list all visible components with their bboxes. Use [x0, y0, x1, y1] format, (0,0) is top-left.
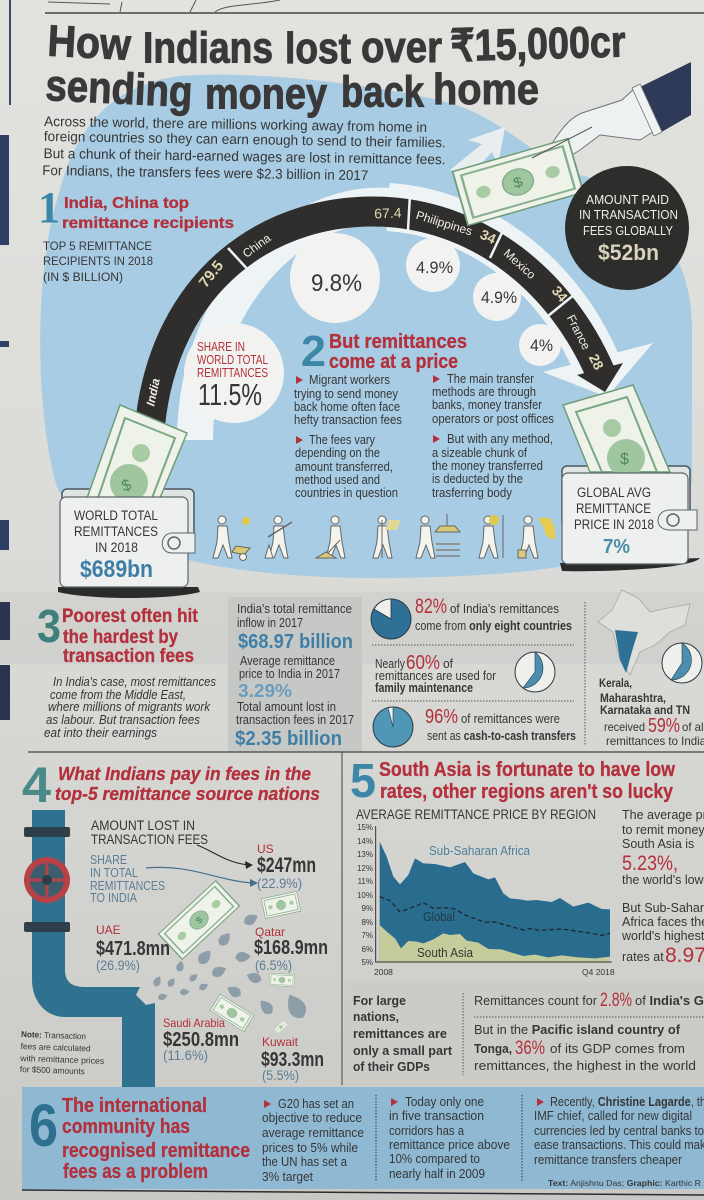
panel: remittances and GDP: 2.8% [600, 990, 632, 1011]
bullets column 1: Migrant workers [309, 372, 390, 387]
data label: Saudi Arabia: Saudi Arabia [163, 1016, 225, 1030]
recipients arc arrow chart: 79.5 [196, 257, 227, 291]
bullets column 2: operators or post offices [432, 411, 554, 426]
section 6 column 2: corridors has a [389, 1123, 465, 1138]
icon strip: migrant workers [213, 514, 555, 560]
blue background blob [40, 75, 692, 578]
note: for $500 amounts [20, 1064, 85, 1076]
section 3 body text: eat into their earnings [44, 726, 157, 740]
data label: UAE: $471.8mn [96, 938, 170, 960]
area chart: remittance price by region: 13% [357, 850, 373, 859]
panel: India remittance figures: transaction fees in 2017 [236, 713, 354, 727]
icon: left wallet with banknote: IN 2018 [95, 540, 138, 555]
section 6 column 3: remittance transfers cheaper [534, 1152, 683, 1167]
stat: family maintenance: family maintenance [375, 681, 473, 695]
data label: Qatar: Qatar [255, 925, 285, 939]
panel: remittances and GDP: 36% [515, 1038, 545, 1059]
area chart: remittance price by region [357, 823, 615, 977]
arrow: amount [197, 845, 253, 869]
bullets column 2 [432, 371, 554, 500]
section 3 heading: 3 [37, 600, 61, 652]
stat: southern states: received [604, 720, 645, 734]
section 6 column 1: the UN has set a [262, 1154, 348, 1169]
area chart: remittance price by region: Q4 2018 [582, 967, 615, 977]
chart subtitle: TOP 5 REMITTANCE [43, 241, 152, 253]
data label: Qatar: $168.9mn [254, 937, 328, 959]
panel: India remittance figures [228, 597, 362, 752]
recipients arc arrow chart: China [240, 231, 274, 261]
note [19, 1029, 105, 1077]
note: fees are calculated [21, 1041, 91, 1053]
chart title: AVERAGE REMITTANCE PRICE BY REGION [356, 807, 596, 822]
intro text [42, 113, 446, 184]
section 5 heading [350, 755, 675, 808]
title: money [205, 70, 327, 118]
area chart: remittance price by region: 2008 [374, 967, 393, 977]
section 6 heading: recognised remittance [62, 1140, 250, 1162]
section 3 body text: In India's case, most remittances [53, 675, 216, 689]
left page edge [0, 0, 11, 720]
section 3 body text: where millions of migrants work [48, 700, 211, 714]
section 6 column 1: G20 has set an [278, 1096, 354, 1111]
section 3 heading: the hardest by [63, 627, 178, 648]
data label: Kuwait: Kuwait [262, 1035, 299, 1049]
section 3 heading: Poorest often hit [62, 606, 199, 627]
data label: US: US [257, 842, 274, 856]
data label: US [257, 842, 316, 891]
callout: India share: REMITTANCES [197, 366, 268, 380]
area chart: remittance price by region: 12% [357, 864, 373, 873]
callout: amount paid globally: AMOUNT PAID [586, 193, 669, 207]
section 3 body text: come from the Middle East, [50, 688, 186, 702]
share percent labels: 4.9% [481, 288, 517, 307]
bullets column 2: The main transfer [447, 371, 535, 386]
bullets column 1: depending on the [295, 445, 380, 460]
stat: family maintenance: Nearly [375, 657, 406, 671]
panel: India remittance figures: Total amount lost in [237, 700, 336, 714]
intro text: Across the world, there are millions working away from home in [44, 113, 427, 135]
title: Indians [143, 24, 273, 72]
share percent labels: 4.9% [416, 258, 453, 277]
icon: right wallet with banknote: REMITTANCE [576, 501, 651, 516]
area chart: remittance price by region: 8% [361, 918, 373, 927]
callout: India share [184, 323, 284, 423]
area chart: remittance price by region: 7% [361, 931, 373, 940]
section 6 column 2: nearly half in 2009 [389, 1166, 485, 1181]
section 6 heading [29, 1092, 250, 1183]
stat: southern states: 59% [648, 715, 680, 737]
section 4 heading: top-5 remittance source nations [55, 784, 320, 804]
data label: UAE: UAE [96, 923, 121, 937]
data label: Kuwait: $93.3mn [261, 1049, 324, 1071]
panel: section 6 band [22, 1087, 704, 1195]
data label: US: $247mn [257, 854, 316, 877]
bullets column 1: countries in question [295, 485, 398, 500]
section 4 heading [22, 757, 320, 813]
recipients arc arrow chart: 28 [586, 351, 607, 372]
legend: amount lost and share: AMOUNT LOST IN [91, 818, 195, 833]
stat: southern states [599, 676, 704, 748]
icon: falling banknotes and drops: $ [194, 915, 205, 926]
panel: India remittance figures: $68.97 billion [238, 631, 353, 653]
chart subtitle [43, 241, 153, 284]
section 6 heading: The international [62, 1095, 207, 1117]
callout: amount paid globally [565, 166, 689, 290]
section 6 column 1 [262, 1096, 364, 1184]
stat: family maintenance: of [443, 657, 453, 671]
legend: amount lost and share: TO INDIA [90, 890, 137, 905]
recipients arc arrow chart: India [143, 377, 163, 407]
legend: amount lost and share: TRANSACTION FEES [91, 832, 208, 847]
icon: right wallet with banknote: GLOBAL AVG [577, 485, 651, 500]
icon: falling banknotes and drops [152, 881, 310, 1034]
intro text: For Indians, the transfers fees were $2.3 billion in 2017 [42, 162, 369, 183]
chart subtitle: RECIPIENTS IN 2018 [43, 256, 153, 268]
section 6 column 1: prices to 5% while [262, 1140, 358, 1155]
section 5 side text: 5.23%, [622, 852, 678, 875]
panel: remittances and GDP: Tonga, [474, 1041, 512, 1056]
legend: amount lost and share: REMITTANCES [90, 878, 165, 893]
data label: Qatar [254, 925, 328, 973]
icon: hand dropping banknote: $ [512, 174, 525, 192]
white share circles [290, 233, 561, 366]
pie: 82 percent [371, 599, 411, 639]
data label: Saudi Arabia: (11.6%) [163, 1047, 208, 1063]
recipients arc arrow chart [143, 194, 623, 425]
pie: 59 percent [662, 643, 702, 683]
icon: left wallet with banknote: REMITTANCES [74, 524, 158, 539]
note: with remittance prices [19, 1053, 104, 1066]
icon: left wallet with banknote: $ [119, 476, 134, 496]
callout: India share: 11.5% [198, 377, 262, 412]
heading 2: 2 [301, 327, 326, 376]
section 4 heading: What Indians pay in fees in the [58, 764, 311, 784]
icon: hand dropping banknote [453, 62, 691, 225]
map: India with southern states [598, 590, 690, 675]
section 6 column 2: remittance price above [389, 1137, 510, 1152]
section 6 heading: community has [62, 1116, 190, 1138]
title [45, 17, 626, 118]
title: lost [285, 24, 351, 73]
pie: 60 percent [515, 652, 555, 692]
recipients arc arrow chart: Philippines [414, 208, 474, 238]
icon: right wallet with banknote: 7% [603, 536, 630, 558]
title: home [433, 65, 539, 114]
pie: 96 percent [373, 707, 413, 747]
stat: family maintenance [375, 652, 496, 695]
heading 2 [301, 327, 467, 376]
area chart: remittance price by region: 11% [358, 877, 373, 886]
bullets column 1: hefty transaction fees [294, 412, 402, 427]
recipients arc arrow chart: Mexico [501, 246, 539, 282]
stat: southern states: Maharashtra, [600, 691, 666, 705]
callout: amount paid globally: $52bn [598, 240, 659, 265]
section 6 column 2: Today only one [405, 1094, 484, 1109]
panel: remittances and GDP: But in the Pacific island country of [474, 1022, 681, 1037]
stat: eight countries: 82% [415, 595, 447, 618]
intro text: But a chunk of their hard-earned wages are lost in remittance fees. [43, 145, 446, 167]
legend: amount lost and share: SHARE [90, 852, 127, 867]
stat: cash to cash: sent as cash-to-cash transfers [427, 729, 576, 743]
bullets column 1: trying to send money [294, 386, 398, 401]
area chart: remittance price by region: 14% [357, 837, 373, 846]
section 5 heading: South Asia is fortunate to have low [379, 759, 675, 781]
section 3 heading: transaction fees [63, 646, 194, 667]
legend: amount lost and share: IN TOTAL [90, 865, 138, 880]
recipients arc arrow chart: France [564, 312, 593, 352]
chart subtitle: (IN $ BILLION) [43, 272, 123, 284]
bullets column 2: But with any method, [447, 431, 553, 446]
white arc behind recipients arrow [195, 206, 653, 440]
heading 1: 1 [38, 183, 60, 232]
callout: India share: SHARE IN [197, 340, 245, 354]
stat: eight countries [415, 595, 572, 633]
stat: family maintenance: 60% [406, 652, 440, 674]
data label: Saudi Arabia: $250.8mn [163, 1029, 239, 1051]
stat: cash to cash: of remittances were [461, 712, 560, 726]
section 6 heading: 6 [29, 1092, 58, 1159]
bullets column 2: methods are through [432, 384, 536, 399]
title: ₹15,000cr [450, 17, 626, 71]
panel: India remittance figures: inflow in 2017 [237, 616, 303, 630]
panel: remittances and GDP: of its GDP comes from [550, 1041, 685, 1056]
share percent labels: 9.8% [311, 270, 362, 297]
area chart: remittance price by region: Global [423, 910, 455, 924]
section 5 side text: world's highest [621, 929, 704, 943]
panel: India remittance figures: 3.29% [238, 681, 292, 701]
section 6 column 3 [534, 1094, 704, 1167]
bullets column 1: back home often face [294, 399, 400, 414]
top strip with masthead edge [45, 0, 704, 13]
section 6 column 2: 10% compared to [389, 1151, 480, 1166]
arrow: share [146, 867, 258, 887]
title: sending [45, 61, 194, 117]
section 5 heading: 5 [350, 755, 376, 808]
icon: right wallet with banknote: $ [620, 451, 629, 468]
panel: remittances and GDP: Remittances count for [474, 993, 598, 1008]
intro text: foreign countries so they can earn enough to send to their families. [44, 128, 446, 150]
title: over [361, 23, 442, 72]
section 5 heading: rates, other regions aren't so lucky [380, 781, 674, 803]
icon: left wallet with banknote: WORLD TOTAL [74, 508, 158, 523]
section 6 column 2 [389, 1094, 510, 1181]
panel: remittances and GDP: only a small part [353, 1043, 453, 1058]
title: back [341, 68, 424, 116]
recipients arc arrow chart: 34 [549, 283, 571, 305]
recipients arc arrow chart: 67.4 [374, 205, 402, 221]
bullets column 1 [294, 372, 402, 500]
panel: India remittance figures: India's total remittance [237, 602, 352, 616]
area chart: remittance price by region: 5% [361, 958, 373, 967]
panel: remittances and GDP [345, 982, 704, 1086]
section 6 heading: fees as a problem [63, 1161, 208, 1183]
icon: left wallet with banknote: $689bn [80, 556, 153, 583]
bullets column 2: a sizeable chunk of [432, 445, 527, 460]
section 3 heading [37, 600, 199, 667]
recipients arc arrow chart: 34 [478, 226, 499, 247]
bullets column 2: is deducted by the [432, 471, 523, 486]
panel: India remittance figures: $2.35 billion [235, 728, 342, 750]
section 6 column 2: in five transaction [389, 1108, 484, 1123]
title: How [46, 17, 133, 70]
bullets column 2: trasferring body [432, 485, 512, 500]
area chart: remittance price by region: 6% [361, 945, 373, 954]
section 6 column 1: 3% target [262, 1169, 313, 1184]
section 5 side text: South Asia is [622, 837, 694, 851]
callout: amount paid globally: IN TRANSACTION [579, 208, 678, 222]
heading 2: come at a price [329, 351, 458, 373]
area chart: remittance price by region: South Asia [417, 946, 473, 960]
stat: family maintenance: remittances are used for [375, 669, 496, 683]
bullets column 1: method used and [295, 472, 380, 487]
stat: cash to cash [425, 706, 576, 743]
data label: Qatar: (6.5%) [255, 957, 292, 973]
heading 1: India, China top [64, 195, 189, 212]
area chart: remittance price by region: 9% [361, 904, 373, 913]
heading 1: remittance recipients [62, 215, 234, 232]
bullets column 1: amount transferred, [295, 459, 393, 474]
legend: amount lost and share [90, 818, 208, 905]
stat: southern states: Karnataka and TN [600, 703, 690, 717]
note: Note: Transaction [21, 1029, 86, 1041]
bullets column 2: the money transferred [432, 458, 543, 473]
share percent labels [311, 258, 553, 355]
callout: India share: WORLD TOTAL [197, 353, 268, 367]
data label: UAE [96, 923, 170, 973]
stat: southern states: Kerala, [599, 676, 632, 690]
section 4 heading: 4 [22, 757, 51, 813]
panel: remittances and GDP: remittances, the highest in the world [474, 1058, 696, 1073]
icon: white arrow in blob [450, 127, 505, 175]
panel: India remittance figures: Average remittance [240, 654, 335, 668]
data label: Kuwait [261, 1035, 324, 1083]
area chart: remittance price by region: 15% [357, 823, 373, 832]
stat: eight countries: of India's remittances [450, 602, 559, 616]
callout: amount paid globally: FEES GLOBALLY [583, 224, 674, 238]
section 6 column 1: objective to reduce [262, 1110, 362, 1125]
section 5 side text: rates at [622, 950, 664, 964]
heading 2: But remittances [329, 331, 467, 353]
icon: leaking pipe [24, 810, 155, 1087]
bullets column 2: banks, money transfer [432, 397, 543, 412]
section 3 body text [44, 675, 216, 740]
data label: Saudi Arabia [163, 1016, 239, 1063]
icon: left wallet with banknote [58, 405, 200, 598]
panel: remittances and GDP: remittances are [353, 1026, 447, 1041]
data label: US: (22.9%) [257, 875, 302, 891]
section 5 side text [621, 808, 704, 967]
stat: cash to cash: 96% [425, 706, 458, 728]
area chart: remittance price by region: Sub-Saharan Africa [429, 844, 530, 858]
icon: right wallet with banknote [560, 385, 700, 571]
share percent labels: 4% [530, 336, 553, 355]
panel: remittances and GDP: nations, [353, 1009, 399, 1024]
panel: remittances and GDP: of their GDPs [353, 1059, 430, 1074]
section 6 column 1: average remittance [262, 1125, 364, 1140]
panel: remittances and GDP: For large [353, 993, 406, 1008]
icon: right wallet with banknote: PRICE IN 2018 [574, 517, 654, 532]
area chart: remittance price by region: 10% [357, 891, 373, 900]
bullets column 1: The fees vary [309, 432, 375, 447]
stat: eight countries: come from only eight countries [415, 619, 572, 633]
heading 1 [38, 183, 234, 232]
section 3 body text: as labour. But transaction fees [46, 713, 200, 727]
data label: UAE: (26.9%) [96, 957, 140, 973]
data label: Kuwait: (5.5%) [262, 1067, 299, 1083]
panel: India remittance figures: price to India in 2017 [239, 667, 340, 681]
